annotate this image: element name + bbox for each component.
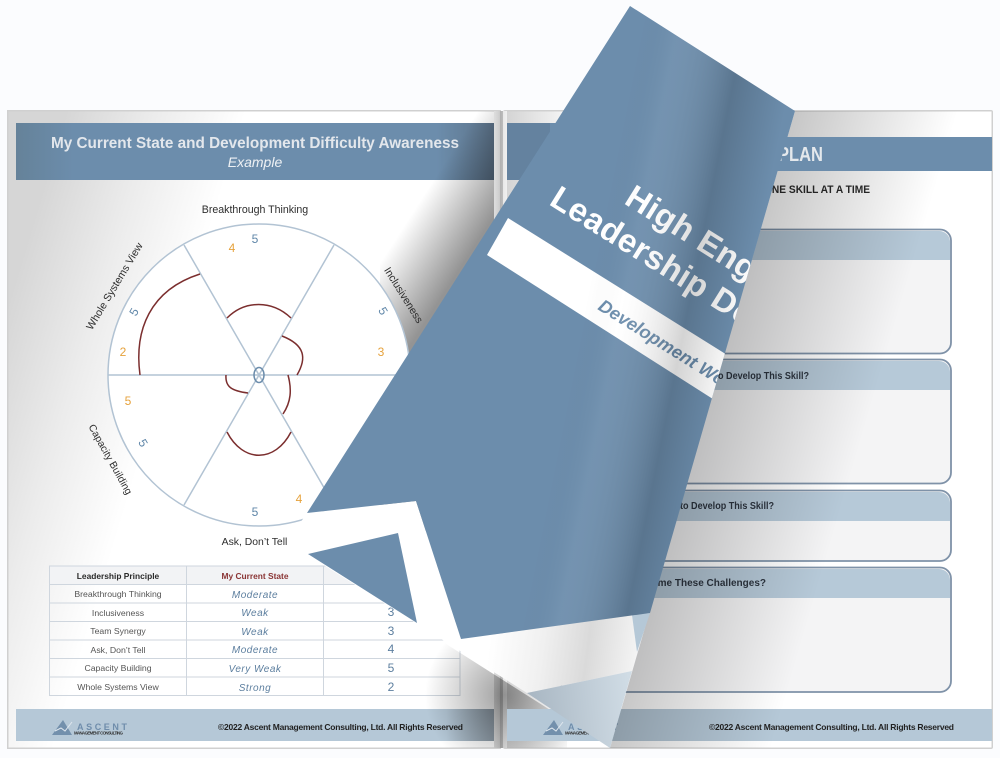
axis score numbers: 5 [135, 437, 151, 450]
axis score numbers [120, 232, 391, 519]
box 3 heading: to Develop This Skill? [680, 501, 774, 512]
light blue fold underside [527, 671, 632, 748]
difficulty column: 3 [388, 624, 395, 638]
right page footer [507, 709, 992, 741]
cover contents [487, 184, 750, 398]
axis score numbers: 5 [125, 394, 132, 408]
heading text: PLAN [778, 144, 823, 166]
left page footer [16, 709, 494, 741]
difficulty column: 4 [388, 642, 395, 656]
copyright: ©2022 Ascent Management Consulting, Ltd. All Rights Reserved [218, 722, 463, 732]
principle column: Team Synergy [90, 626, 146, 636]
band subtitle: Development Workbook [595, 295, 781, 422]
current state column: Strong [239, 683, 271, 694]
center oval [254, 368, 264, 382]
axis score numbers: 5 [126, 305, 142, 318]
folded blue corner [308, 533, 417, 623]
axis score numbers: 5 [252, 505, 259, 519]
axis score numbers: 2 [120, 345, 127, 359]
cover title: High Engagement [619, 178, 882, 361]
axis score numbers: 4 [296, 492, 303, 506]
axis score numbers: 3 [378, 345, 385, 359]
right logo: ASCENT [568, 722, 621, 732]
radar chart [84, 204, 425, 548]
principle column [74, 589, 162, 692]
white band [487, 218, 725, 398]
principle column: Ask, Don’t Tell [91, 645, 146, 655]
current state column: Weak [241, 608, 269, 619]
current state curves [139, 274, 303, 455]
axis labels: Whole Systems View [84, 241, 146, 332]
logo [52, 720, 130, 736]
box 4 [560, 568, 951, 692]
chart circle and spokes [108, 224, 410, 526]
current state column [229, 590, 282, 694]
right page [503, 110, 993, 749]
left page heading band [16, 123, 494, 180]
right page heading band [507, 123, 992, 180]
table header row: My Current State [221, 571, 289, 581]
axis labels: Breakthrough Thinking [202, 204, 308, 216]
cover blue [307, 6, 795, 639]
folded white back of cover [287, 501, 637, 693]
right logo: MANAGEMENT CONSULTING [565, 730, 615, 736]
principle column: Inclusiveness [92, 608, 145, 618]
table header row [77, 571, 289, 581]
axis score numbers: 5 [375, 305, 391, 318]
box 2 heading: to Develop This Skill? [715, 371, 809, 382]
current state column: Moderate [232, 590, 278, 601]
axis labels: Ask, Don’t Tell [222, 537, 287, 548]
logo: ASCENT [77, 722, 130, 732]
right page instruction: ONE SKILL AT A TIME [764, 184, 870, 196]
current state column: Very Weak [229, 664, 282, 675]
heading: title: My Current State and Development Difficulty Awareness [51, 135, 459, 152]
axis labels [84, 204, 425, 548]
difficulty column [388, 605, 395, 694]
heading: subtitle: Example [228, 154, 282, 170]
table header row: Leadership Principle [77, 571, 160, 581]
right copyright: ©2022 Ascent Management Consulting, Ltd. All Rights Reserved [709, 722, 954, 732]
difficulty column: 3 [388, 605, 395, 619]
principle column: Whole Systems View [77, 682, 159, 692]
principle column: Capacity Building [84, 663, 152, 673]
current state column: Moderate [232, 645, 278, 656]
left page [7, 110, 501, 749]
cover title: Leadership Development [544, 179, 904, 423]
cover title [550, 184, 750, 320]
difficulty column: 2 [388, 680, 395, 694]
box 4 heading: Overcome These Challenges? [623, 578, 766, 589]
right logo [543, 720, 621, 736]
light blue sliver [632, 613, 650, 652]
box 3 [560, 490, 951, 561]
axis labels: Inclusiveness [381, 265, 425, 326]
box 2 [560, 360, 951, 484]
axis labels: Capacity Building [86, 423, 134, 497]
logo: MANAGEMENT CONSULTING [74, 730, 124, 736]
current state column: Weak [241, 627, 269, 638]
table [50, 566, 460, 696]
box 1 [560, 230, 951, 354]
difficulty column: 5 [388, 661, 395, 675]
axis score numbers: 4 [229, 241, 236, 255]
page curl with workbook cover [302, 6, 795, 748]
principle column: Breakthrough Thinking [74, 589, 162, 599]
axis score numbers: 5 [252, 232, 259, 246]
